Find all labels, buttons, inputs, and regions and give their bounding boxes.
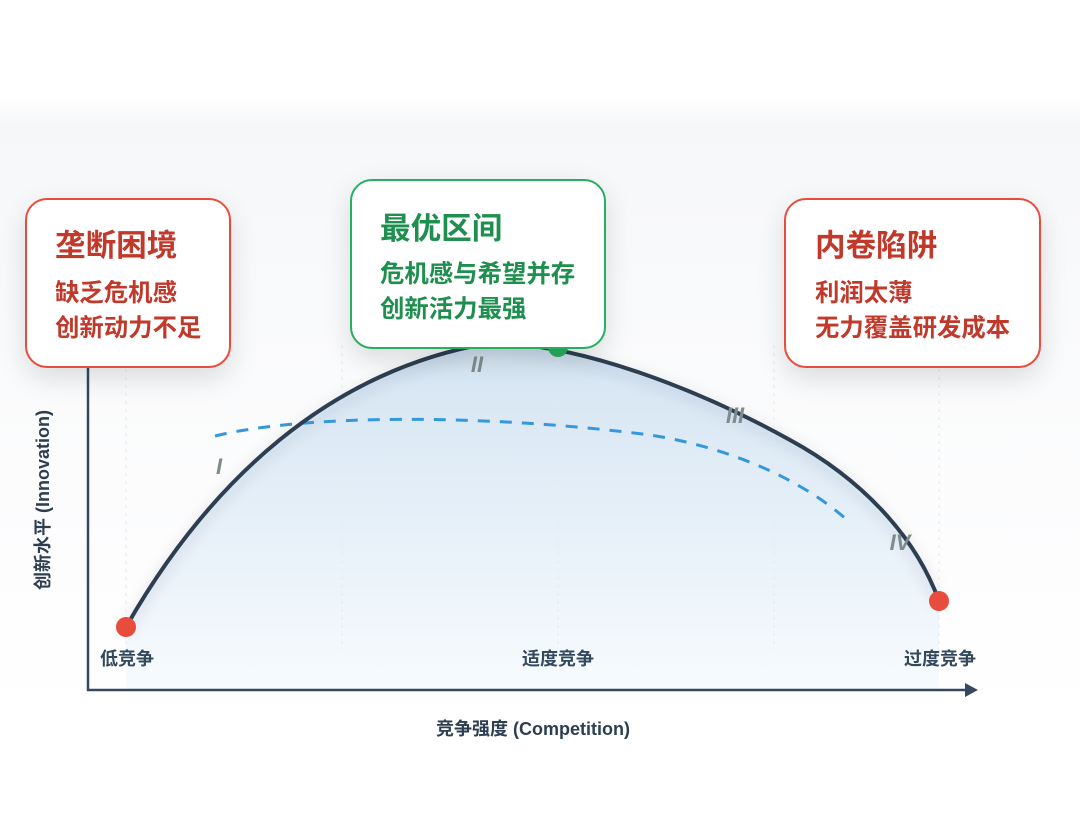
- main curve: [126, 343, 939, 627]
- stage labels: I: [216, 454, 223, 479]
- text block: [815, 280, 1010, 342]
- grid lines: [126, 345, 939, 650]
- point: low competition: [116, 617, 136, 637]
- text block: 创新活力最强: [380, 296, 526, 323]
- point: optimum: [548, 337, 568, 357]
- heading: 最优区间: [380, 212, 502, 246]
- area under curve: [126, 343, 939, 690]
- curve shadow: [126, 347, 939, 631]
- y axis: [87, 360, 89, 691]
- panel: involution trap: [784, 198, 1041, 368]
- point: excessive competition: [929, 591, 949, 611]
- text block: [380, 260, 575, 323]
- text block: [55, 280, 201, 342]
- stage labels: III: [726, 403, 745, 428]
- stage labels: IV: [890, 530, 913, 555]
- panel: optimal zone: [350, 179, 606, 349]
- y axis title: 创新水平 (Innovation): [32, 410, 53, 590]
- text block: 危机感与希望并存: [380, 261, 575, 288]
- x axis title: 竞争强度 (Competition): [436, 718, 630, 739]
- heading: 内卷陷阱: [815, 229, 937, 263]
- panel: monopoly dilemma: [25, 198, 231, 368]
- x axis tick labels: [100, 648, 976, 669]
- text block: 无力覆盖研发成本: [815, 315, 1010, 342]
- stage labels: II: [471, 352, 484, 377]
- text block: 缺乏危机感: [55, 280, 177, 307]
- x axis tick labels: 过度竞争: [904, 648, 976, 669]
- text block: 创新动力不足: [55, 315, 201, 342]
- heading: 垄断困境: [55, 229, 177, 263]
- text block: 利润太薄: [815, 280, 913, 307]
- dashed curve: [215, 419, 846, 519]
- x axis tick labels: 适度竞争: [522, 648, 594, 669]
- x axis tick labels: 低竞争: [100, 648, 154, 669]
- stage labels: [216, 352, 913, 555]
- x axis with arrow: [87, 683, 978, 697]
